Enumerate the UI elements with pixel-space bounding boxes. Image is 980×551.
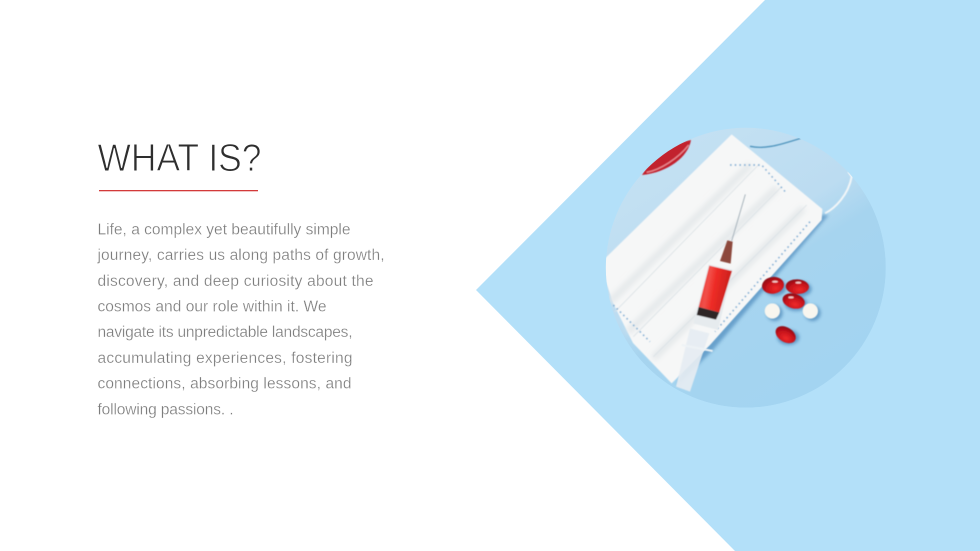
body paragraph: cosmos and our role within it. We bbox=[98, 298, 326, 316]
mask pleats bbox=[610, 165, 807, 358]
barrel bbox=[693, 264, 733, 330]
red lens at top bbox=[642, 140, 691, 175]
mask shadow bbox=[698, 213, 829, 366]
mask stitching bbox=[613, 165, 810, 342]
circular photo: mask, syringe and pills bbox=[600, 128, 886, 408]
body paragraph: Life, a complex yet beautifully simple bbox=[98, 222, 350, 238]
photo background bbox=[606, 128, 886, 408]
needle bbox=[732, 194, 745, 241]
body paragraph bbox=[96, 222, 384, 418]
ear loops bbox=[750, 138, 852, 213]
syringe bbox=[676, 194, 745, 392]
flange bbox=[704, 348, 714, 352]
surgical mask bbox=[600, 134, 822, 383]
blue diamond background panel bbox=[476, 0, 980, 551]
body paragraph: journey, carries us along paths of growth, bbox=[96, 247, 384, 264]
capsule shadows bbox=[764, 279, 821, 345]
body paragraph: following passions. . bbox=[98, 402, 234, 418]
stopper bbox=[697, 307, 719, 320]
body paragraph: discovery, and deep curiosity about the bbox=[98, 273, 374, 290]
red capsules bbox=[761, 276, 809, 347]
white pills bbox=[765, 303, 818, 319]
plunger bbox=[676, 328, 709, 392]
body paragraph: accumulating experiences, fostering bbox=[98, 350, 352, 367]
body paragraph: connections, absorbing lessons, and bbox=[98, 376, 352, 392]
hub bbox=[720, 240, 733, 264]
red underline bbox=[99, 190, 258, 191]
liquid bbox=[699, 266, 732, 312]
title: WHAT IS? bbox=[98, 137, 262, 180]
body paragraph: navigate its unpredictable landscapes, bbox=[98, 324, 352, 341]
